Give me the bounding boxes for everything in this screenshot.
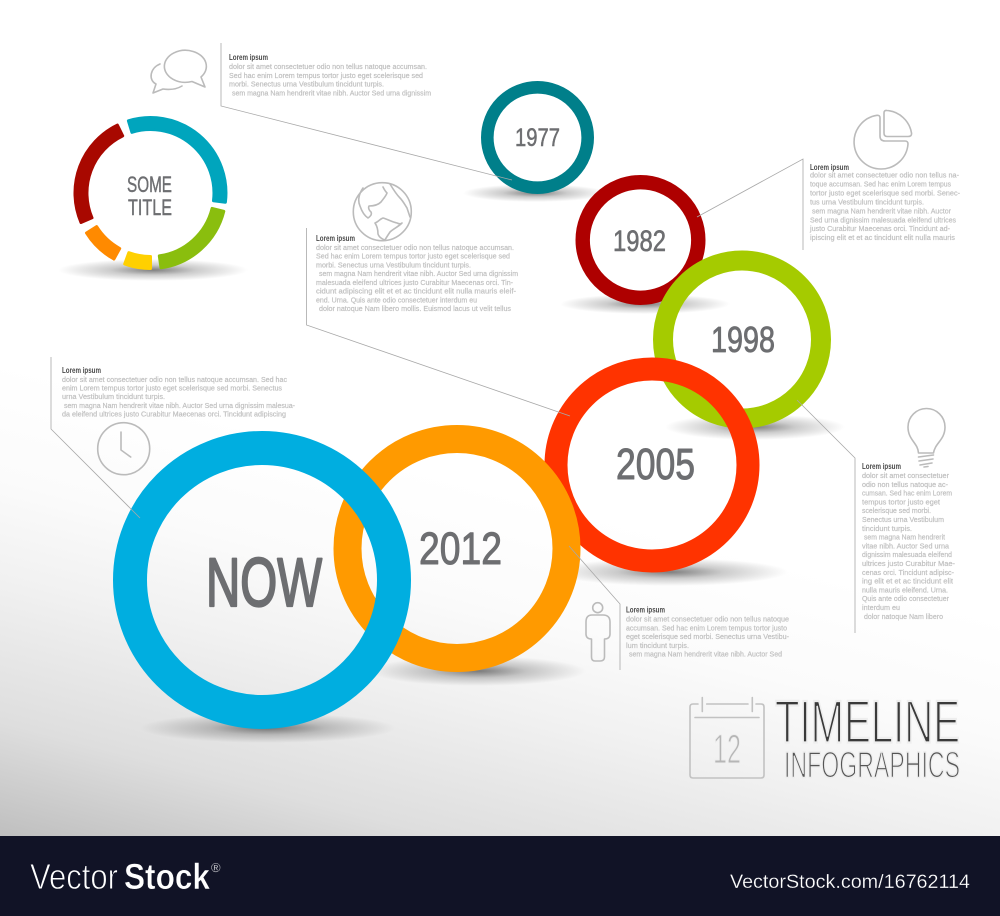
ring: 2005 [556,369,748,561]
text block: NOW: dolor sit amet consectetuer odio non tellus natoque accumsan. Sed hac [62,375,287,384]
text block: 1982: toque accumsan. Sed hac enim Lorem tempus [810,180,951,189]
icon: calendar: 12 [713,726,741,772]
leader line: 1998 [797,400,855,633]
text block: 2012: Lorem ipsum [626,606,665,615]
icon: speech bubbles [151,50,206,93]
text block: NOW: urna Vestibulum tincidunt turpis. [62,392,165,401]
text block: NOW: sem magna Nam hendrerit vitae nibh. Auctor Sed urna dignissim malesua- [64,401,295,410]
segment: teal [128,118,226,202]
text block: 1982 [809,163,960,242]
text block: NOW: enim Lorem tempus tortor justo eget scelerisque sed morbi. Senectus [62,384,282,392]
text block: 1982: tus urna Vestibulum tincidunt turpis. [810,197,924,206]
ring: NOW [130,448,394,712]
text block: 1982: justo Curabitur Maecenas orci. Tincidunt ad- [809,224,950,233]
segment: orange [86,227,120,259]
segmented title donut [75,118,226,269]
donut title: TITLE [128,195,172,220]
icon: light bulb [908,408,945,467]
icon: clock [98,423,150,475]
icon: pie chart [854,110,912,169]
segment: dark red [75,125,123,222]
text block: 2012: lum tincidunt turpis. [626,641,689,650]
leader line: 1977 [221,43,512,180]
text block: 2005: Sed hac enim Lorem tempus tortor justo eget scelerisque sed [316,252,510,261]
text block: 2005 [316,234,518,313]
year label: 1982: 1982 [613,225,666,258]
footer image id: VectorStock.com/16762114 [730,871,970,893]
text block: 1998: scelerisque sed morbi. [862,506,931,515]
text block: 1998: interdum eu [862,603,900,612]
icon: person [586,603,610,661]
text block: 1982: Sed urna dignissim malesuada eleifend ultrices [810,215,956,224]
leader line: 1982 [697,159,803,250]
leader line: NOW [51,357,140,518]
leader line: 2005 [306,228,570,416]
text block: 1998: vitae nibh. Auctor Sed urna [862,541,950,550]
text block: 2012: accumsan. Sed hac enim Lorem tempus tortor justo [626,624,787,632]
text block: 2005: morbi. Senectus urna Vestibulum tincidunt turpis. [316,260,471,269]
text block: 1977: sem magna Nam hendrerit vitae nibh. Auctor Sed urna dignissim [232,88,431,97]
text block: 2005: malesuada eleifend ultrices justo Curabitur Maecenas orci. Tin- [316,278,513,287]
year label: 2012: 2012 [419,523,502,574]
text block: 2005: dolor natoque Nam libero mollis. Euismod lacus ut velit tellus [319,304,511,313]
text block: 1998: Quis ante odio consectetuer [862,594,949,603]
text block: 1998: Senectus urna Vestibulum [862,515,944,524]
label: NOW: NOW [206,544,322,621]
year label: 1977: 1977 [515,124,560,152]
text block: 1998: Lorem ipsum [862,462,901,471]
text block: 1982: tortor justo eget scelerisque sed morbi. Senec- [810,189,960,198]
text block: 2005: end. Urna. Quis ante odio consectetuer interdum eu [316,295,477,304]
text block: 1998: dignissim malesuada eleifend [862,550,952,559]
text block: 1982: ipiscing elit et et ac tincidunt elit nulla mauris [810,233,955,242]
text block: 1998: tincidunt turpis. [862,524,912,533]
text block: NOW [62,366,295,419]
text block: 1998: odio non tellus natoque ac- [862,480,948,489]
footer logo [30,856,221,897]
segment: green [159,208,224,268]
year label: 1998: 1998 [711,319,775,360]
circle shadows [58,184,845,743]
text block: 1998 [862,462,955,621]
text block: 1998: sem magna Nam hendrerit [864,533,946,542]
footer bar [0,836,1000,916]
text block: NOW: da eleifend ultrices justo Curabitur Maecenas orci. Tincidunt adipiscing [62,410,286,419]
text block: 2012: dolor sit amet consectetuer odio non tellus natoque [626,615,789,624]
text block: 1998: dolor sit amet consectetuer [862,471,949,480]
leader line: 2012 [569,546,620,670]
ring: 1982 [583,182,698,298]
footer logo: ® [211,860,221,875]
text block: 1977: Lorem ipsum [229,53,268,62]
text block: 2005: sem magna Nam hendrerit vitae nibh. Auctor Sed urna dignissim [319,269,518,278]
year label: 2005: 2005 [616,440,695,489]
text block: 1982: Lorem ipsum [810,163,849,172]
segment: yellow [125,253,150,269]
text block: 1998: ultrices justo Curabitur Mae- [862,559,955,568]
text block: 2012: sem magna Nam hendrerit vitae nibh. Auctor Sed [629,650,782,659]
text block: 1977: dolor sit amet consectetuer odio non tellus natoque accumsan. [229,62,427,71]
footer logo: Vector [30,856,118,897]
text block: 1977: morbi. Senectus urna Vestibulum tincidunt turpis. [229,80,384,88]
text block: 1998: nulla mauris eleifend. Urna. [862,585,948,594]
text block: 1977 [229,53,431,97]
donut title [127,172,172,220]
text block: 2005: Lorem ipsum [316,234,355,243]
text block: 1982: sem magna Nam hendrerit vitae nibh. Auctor [812,206,951,215]
text block: 1998: cenas orci. Tincidunt adipisc- [862,568,954,577]
text block: 1977: Sed hac enim Lorem tempus tortor justo eget scelerisque sed [229,71,423,80]
text block: NOW: Lorem ipsum [62,366,101,375]
donut title: SOME [127,172,172,197]
text block: 1998: cumsan. Sed hac enim Lorem [862,489,952,498]
text block: 2005: dolor sit amet consectetuer odio non tellus natoque accumsan. [316,243,514,252]
footer logo: Stock [124,856,211,897]
ring: 1998 [663,260,821,418]
text block: 1998: ing elit et et ac tincidunt elit [862,577,954,586]
text block: 1982: dolor sit amet consectetuer odio non tellus na- [810,171,959,180]
text block: 1998: tempus tortor justo eget [862,497,941,506]
text block: 2012 [626,606,789,659]
ring: 2012 [348,439,566,658]
text block: 1998: dolor natoque Nam libero [864,612,943,621]
icon: calendar [690,698,764,778]
icon: globe [353,183,411,241]
text block: 2012: eget scelerisque sed morbi. Senectus urna Vestibu- [626,632,789,641]
text block: 2005: cidunt adipiscing elit et et ac tincidunt elit nulla mauris eleif- [316,287,516,296]
ring: 1977 [487,87,588,188]
